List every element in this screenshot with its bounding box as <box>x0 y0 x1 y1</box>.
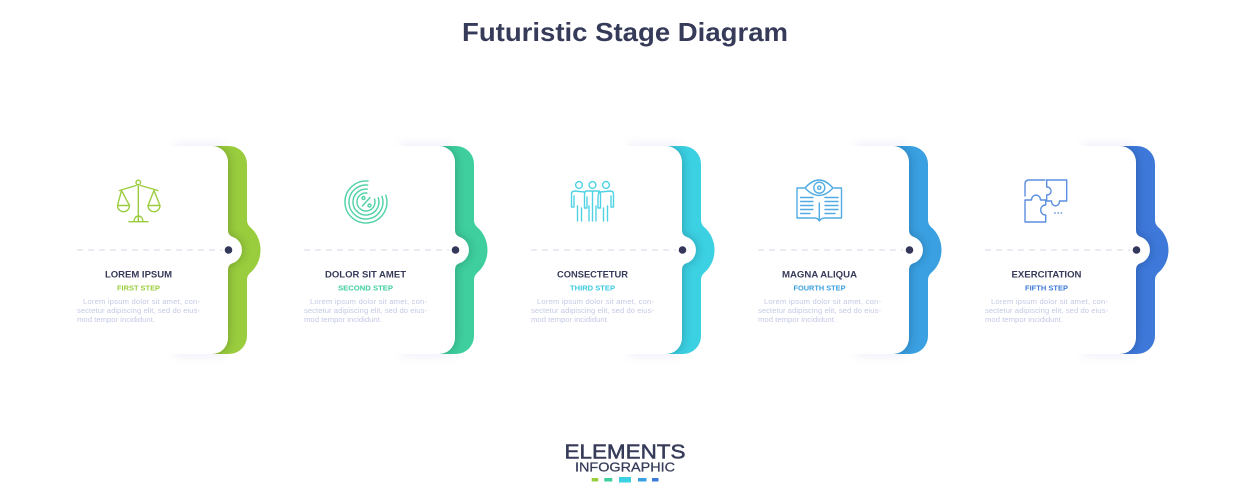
body text: sectetur adipiscing elit, sed do eius- <box>531 306 654 315</box>
timeline dot <box>225 246 232 254</box>
timeline dot <box>452 246 459 254</box>
title: Futuristic Stage Diagram <box>462 17 788 47</box>
white card <box>968 146 1150 354</box>
body text: mod tempor incididunt. <box>985 315 1063 324</box>
icon: radar with percent <box>345 181 387 223</box>
icon: open book with eye <box>797 180 842 221</box>
body text: Lorem ipsum dolor sit amet, con- <box>83 297 200 306</box>
body text: mod tempor incididunt. <box>758 315 836 324</box>
heading: EXERCITATION <box>1012 270 1082 280</box>
body text <box>77 297 200 324</box>
panel: step 3 <box>514 144 714 356</box>
timeline dot <box>1133 246 1140 254</box>
heading: MAGNA ALIQUA <box>782 270 857 280</box>
white card <box>60 146 242 354</box>
body text: Lorem ipsum dolor sit amet, con- <box>310 297 427 306</box>
white card <box>287 146 469 354</box>
body text: sectetur adipiscing elit, sed do eius- <box>77 306 200 315</box>
tab: indigo blue <box>1113 146 1168 354</box>
tab: cyan <box>659 146 714 354</box>
body text: sectetur adipiscing elit, sed do eius- <box>985 306 1108 315</box>
body text: mod tempor incididunt. <box>77 315 155 324</box>
body text: mod tempor incididunt. <box>531 315 609 324</box>
body text: Lorem ipsum dolor sit amet, con- <box>991 297 1108 306</box>
heading: LOREM IPSUM <box>105 270 172 280</box>
step label: SECOND STEP <box>338 284 393 292</box>
body text: sectetur adipiscing elit, sed do eius- <box>758 306 881 315</box>
timeline dot <box>906 246 913 254</box>
logo: INFOGRAPHIC <box>575 460 675 474</box>
body text <box>304 297 427 324</box>
tab: green <box>205 146 260 354</box>
logo: ELEMENTS <box>564 442 686 464</box>
heading: CONSECTETUR <box>557 270 628 280</box>
body text <box>531 297 654 324</box>
body text <box>758 297 881 324</box>
step label: FIRST STEP <box>117 284 160 292</box>
body text: Lorem ipsum dolor sit amet, con- <box>764 297 881 306</box>
step label: FIFTH STEP <box>1025 284 1068 292</box>
panel: step 5 <box>968 144 1168 356</box>
tab: blue <box>886 146 942 354</box>
body text: sectetur adipiscing elit, sed do eius- <box>304 306 427 315</box>
icon: puzzle pieces <box>1025 180 1067 222</box>
body text <box>985 297 1108 324</box>
body text: mod tempor incididunt. <box>304 315 382 324</box>
white card <box>514 146 696 354</box>
icon: three people <box>572 182 614 221</box>
step label: FOURTH STEP <box>794 284 846 292</box>
icon: scales <box>118 180 160 222</box>
panel: step 1 <box>60 144 260 356</box>
heading: DOLOR SIT AMET <box>325 270 406 280</box>
panel: step 4 <box>741 144 942 356</box>
panel: step 2 <box>287 144 488 356</box>
step label: THIRD STEP <box>570 284 615 292</box>
body text: Lorem ipsum dolor sit amet, con- <box>537 297 654 306</box>
logo <box>564 442 686 482</box>
white card <box>741 146 923 354</box>
timeline dot <box>679 246 686 254</box>
tab: teal <box>432 146 488 354</box>
